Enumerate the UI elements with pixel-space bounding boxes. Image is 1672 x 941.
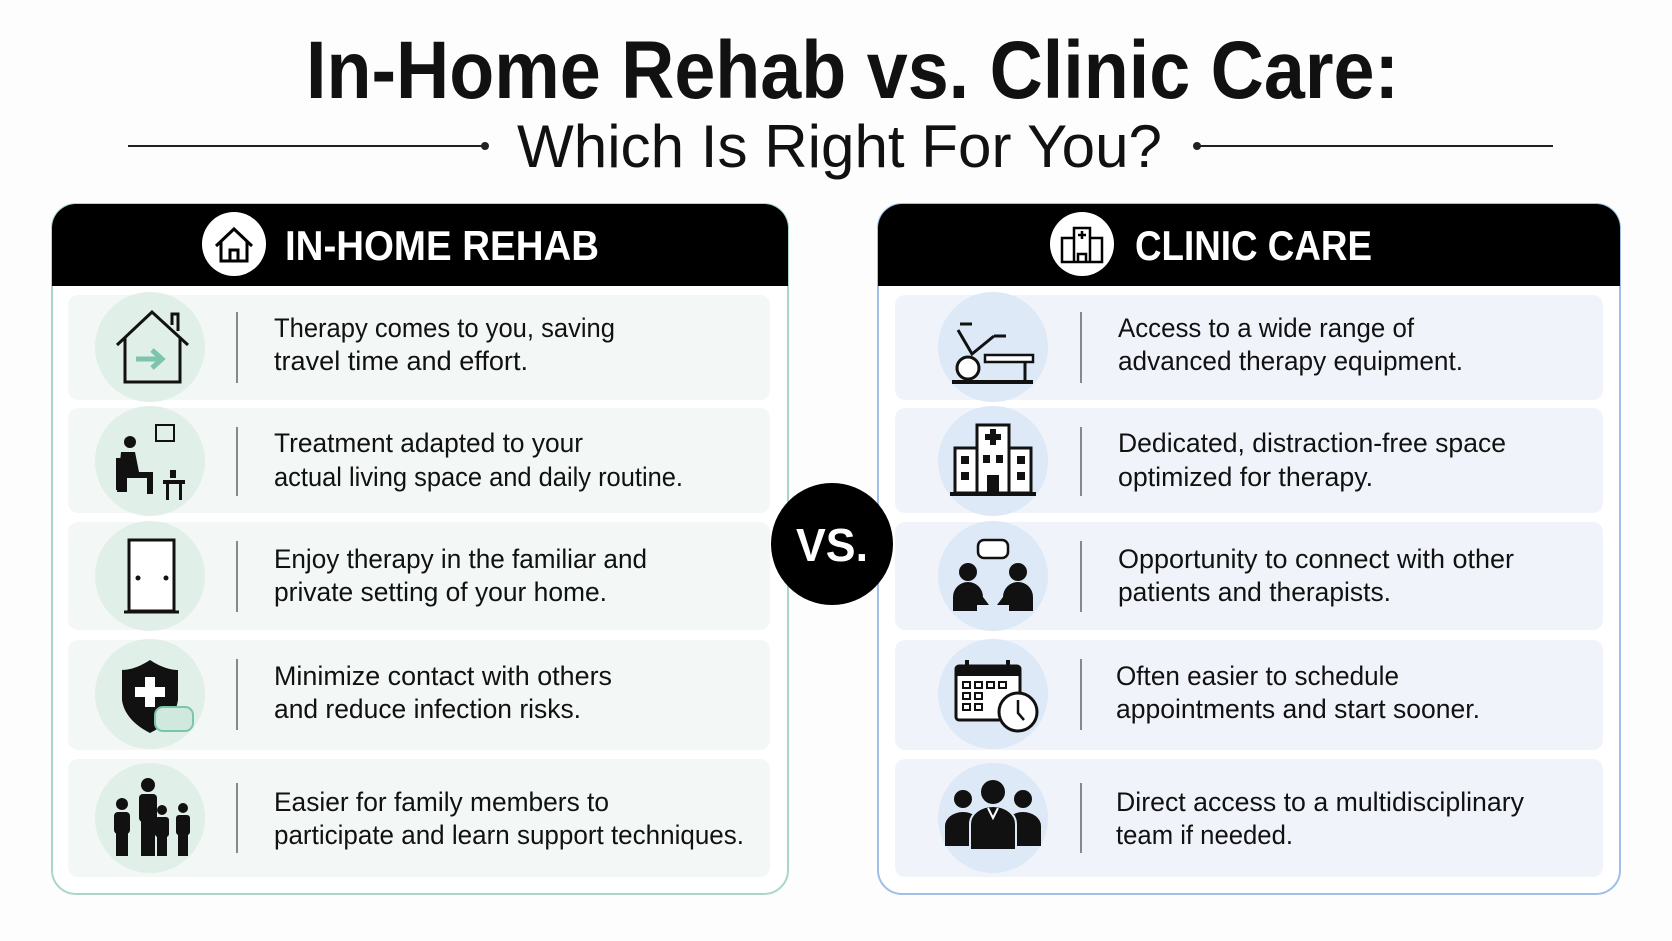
header: in-home rehab: IN-HOME REHAB <box>285 222 599 269</box>
panel: clinic care <box>878 204 1620 894</box>
row 5 <box>895 759 1603 877</box>
header: clinic care <box>878 204 1620 286</box>
header: in-home rehab <box>52 204 788 286</box>
row 5: participate and learn support techniques. <box>274 820 744 850</box>
row 2: Dedicated, distraction-free space <box>1118 428 1506 458</box>
row 5: team if needed. <box>1116 820 1293 850</box>
row 4 <box>68 639 770 750</box>
row 3: private setting of your home. <box>274 577 607 607</box>
row 3 <box>895 521 1603 631</box>
vs badge <box>771 483 893 605</box>
row 1 <box>68 292 770 402</box>
header: clinic care: CLINIC CARE <box>1135 222 1372 269</box>
row 2: actual living space and daily routine. <box>274 462 683 492</box>
row 1: travel time and effort. <box>274 346 528 376</box>
row 2 <box>895 406 1603 516</box>
subtitle: Which Is Right For You? <box>517 113 1162 180</box>
row 5 <box>68 759 770 877</box>
row 4 <box>895 639 1603 750</box>
row 3: Opportunity to connect with other <box>1118 544 1514 574</box>
title: In-Home Rehab vs. Clinic Care: <box>306 25 1399 116</box>
row 1 <box>895 292 1603 402</box>
row 2: Treatment adapted to your <box>274 428 583 458</box>
row 2 <box>68 406 770 516</box>
row 4: Often easier to schedule <box>1116 661 1399 691</box>
subtitle <box>128 113 1553 180</box>
vs badge: VS. <box>796 519 868 571</box>
row 2: optimized for therapy. <box>1118 462 1373 492</box>
row 1: Therapy comes to you, saving <box>274 313 615 343</box>
panel: in-home rehab <box>52 204 788 894</box>
row 1: Access to a wide range of <box>1118 313 1414 343</box>
row 3: patients and therapists. <box>1118 577 1391 607</box>
row 4: Minimize contact with others <box>274 661 612 691</box>
row 4: appointments and start sooner. <box>1116 694 1480 724</box>
row 5: Direct access to a multidisciplinary <box>1116 787 1524 817</box>
row 5: Easier for family members to <box>274 787 609 817</box>
row 3: Enjoy therapy in the familiar and <box>274 544 647 574</box>
row 3 <box>68 521 770 631</box>
row 4: and reduce infection risks. <box>274 694 581 724</box>
row 1: advanced therapy equipment. <box>1118 346 1463 376</box>
